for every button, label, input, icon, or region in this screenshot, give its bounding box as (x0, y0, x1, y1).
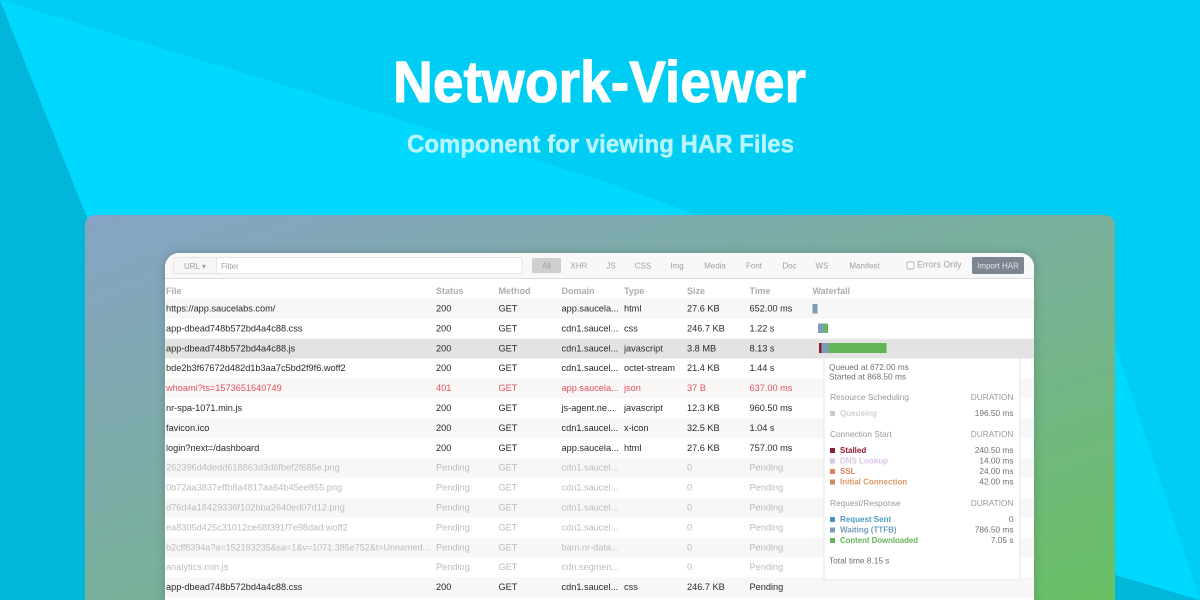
row: pending analytics: GET (498, 562, 518, 572)
table header: Status (436, 286, 464, 296)
tooltip: timing breakdown (824, 358, 1020, 580)
row: css: cdn1.saucel... (562, 323, 618, 333)
row: css repeat (166, 582, 783, 592)
toolbar: CSS (635, 262, 651, 270)
section: connection start: SSL (840, 467, 856, 476)
row: pending analytics (166, 562, 783, 572)
row: pending png 1: Pending (436, 463, 470, 473)
row: pending beacon (166, 542, 783, 552)
total time: Total time 8.15 s (829, 556, 889, 566)
section: request and response (830, 498, 1014, 545)
row: login: app.saucela... (562, 443, 619, 453)
row: whoami error: app.saucela... (562, 383, 619, 393)
section: connection start (830, 429, 1014, 486)
row: pending analytics: analytics.min.js (166, 562, 229, 572)
timing start text: Queued at 672.00 ms (829, 362, 909, 372)
row: pending png 2: 0b72aa3837effb8a4817aa64b45ee855.png (166, 483, 342, 493)
row: woff2: bde2b3f67672d482d1b3aa7c5bd2f9f6.woff2 (166, 363, 346, 373)
section: connection start: 14.00 ms (979, 456, 1014, 466)
row: app.saucelabs.com (166, 304, 793, 314)
table header (166, 286, 850, 296)
row: pending png 2: Pending (436, 483, 470, 493)
toolbar: Filter (221, 262, 239, 271)
row: login: 200 (436, 443, 451, 453)
row: pending beacon: Pending (436, 542, 470, 552)
row: favicon: 1.04 s (750, 423, 775, 433)
row: woff2: GET (498, 363, 518, 373)
section: request and response: Request/Response (830, 498, 901, 508)
row: pending analytics: 0 (687, 562, 692, 572)
row: woff2 (166, 363, 775, 373)
row: login: 757.00 ms (750, 443, 793, 453)
panel: gradient backdrop (85, 215, 1115, 600)
row: css: GET (498, 323, 518, 333)
row: pending woff2 (166, 522, 783, 532)
toolbar: JS (606, 262, 616, 270)
table header: Method (498, 286, 530, 296)
row: css: css (624, 323, 638, 333)
row: pending png 3: GET (498, 502, 518, 512)
row: app.saucelabs.com: html (624, 304, 641, 314)
section: connection start: 42.00 ms (979, 476, 1014, 486)
section: connection start: DNS Lookup (840, 456, 888, 466)
row: favicon: x-icon (624, 423, 649, 433)
row: pending png 1: cdn1.saucel... (562, 463, 618, 473)
row: pending png 1: 262396d4dedd618863d3d6fbef2f685e.png (166, 463, 340, 473)
row: js: app-dbead748b572bd4a4c88.js (166, 343, 296, 353)
row: pending woff2: 0 (687, 522, 692, 532)
section: resource scheduling (830, 392, 1014, 418)
row: pending png 1: Pending (750, 463, 783, 473)
section: connection start: DURATION (971, 429, 1014, 439)
section: resource scheduling: DURATION (971, 392, 1014, 402)
row: pending beacon: b2cff8394a?a=152193235&sa=1&v=1071.385e752&t=Unnamed... (166, 542, 430, 552)
section: request and response: DURATION (971, 498, 1014, 508)
toolbar: Media (704, 262, 726, 270)
row: favicon: 32.5 KB (687, 423, 720, 433)
section: connection start: Initial Connection (840, 478, 907, 486)
row: nr-spa: GET (498, 403, 518, 413)
row: nr-spa: nr-spa-1071.min.js (166, 403, 242, 413)
row: login: html (624, 443, 641, 453)
row: app.saucelabs.com: https://app.saucelabs.com/ (166, 304, 276, 314)
section: resource scheduling: 196.50 ms (975, 408, 1014, 418)
row: nr-spa: js-agent.ne... (560, 403, 615, 413)
table header: File (166, 286, 182, 296)
waterfall bars (812, 304, 886, 353)
toolbar: Import HAR (977, 262, 1019, 270)
section: request and response: Request Sent (840, 515, 891, 524)
row: woff2: octet-stream (624, 363, 675, 373)
toolbar: Manifest (849, 262, 880, 270)
row: pending analytics: cdn.segmen... (562, 562, 619, 572)
row: whoami error: 401 (436, 383, 451, 393)
subtitle: Component for viewing HAR Files (407, 130, 794, 158)
table header: Domain (562, 286, 595, 296)
row: pending png 2: GET (498, 483, 518, 493)
row: js: 200 (436, 343, 451, 353)
row: css repeat: cdn1.saucel... (562, 582, 618, 592)
section: connection start: Stalled (840, 446, 866, 455)
row: pending png 2: 0 (687, 483, 692, 493)
row: js: javascript (623, 343, 663, 353)
row: css repeat: 200 (436, 582, 451, 592)
section: resource scheduling: Queueing (840, 409, 877, 418)
row: pending woff2: ea8305d425c31012ce68f391f7e98dad.woff2 (166, 522, 348, 532)
toolbar: URL ▾ (184, 262, 206, 271)
row: favicon: GET (498, 423, 518, 433)
toolbar: Font (746, 262, 763, 270)
toolbar: Errors Only (917, 260, 962, 270)
row: login: GET (498, 443, 518, 453)
row: pending png 1: GET (498, 463, 518, 473)
row: pending beacon: 0 (687, 542, 692, 552)
row: css: 246.7 KB (687, 323, 725, 333)
toolbar: WS (816, 262, 828, 270)
row: app.saucelabs.com: 652.00 ms (750, 304, 793, 314)
row: nr-spa (166, 403, 793, 413)
row: whoami error: 637.00 ms (750, 383, 793, 393)
row: css: app-dbead748b572bd4a4c88.css (166, 323, 303, 333)
row: favicon: 200 (436, 423, 451, 433)
row: pending analytics: Pending (436, 562, 470, 572)
row: favicon: favicon.ico (166, 423, 209, 433)
row: css: 1.22 s (750, 323, 775, 333)
row: app.saucelabs.com: 200 (436, 304, 451, 314)
section: connection start: 24.00 ms (979, 466, 1014, 476)
row: whoami error: 37 B (687, 383, 706, 393)
row: whoami error: whoami?ts=1573651640749 (165, 383, 282, 393)
row: pending woff2: GET (498, 522, 518, 532)
row: app.saucelabs.com: app.saucela... (562, 304, 619, 314)
section: request and response: 786.50 ms (975, 524, 1014, 534)
title: Network-Viewer (393, 50, 806, 115)
row: pending png 3: cdn1.saucel... (562, 502, 618, 512)
row: js: GET (498, 343, 518, 353)
row: css repeat: css (624, 582, 638, 592)
row: login: login?next=/dashboard (166, 443, 259, 453)
row: pending beacon: GET (498, 542, 518, 552)
row: favicon: cdn1.saucel... (562, 423, 618, 433)
row: pending woff2: Pending (750, 522, 783, 532)
row: pending png 1 (166, 463, 783, 473)
row: woff2: 1.44 s (750, 363, 775, 373)
row: pending png 2: cdn1.saucel... (562, 483, 618, 493)
row: js: 3.8 MB (687, 343, 716, 353)
row: pending png 3: d76d4a18429336f102bba2640ed07d12.png (166, 502, 345, 512)
row: app.saucelabs.com: 27.6 KB (687, 304, 720, 314)
section: request and response: 7.05 s (991, 535, 1014, 545)
row: pending analytics: Pending (750, 562, 783, 572)
row: pending beacon: Pending (750, 542, 783, 552)
row: css repeat: app-dbead748b572bd4a4c88.css (166, 582, 303, 592)
row: css (166, 323, 775, 333)
row: woff2: cdn1.saucel... (562, 363, 618, 373)
section: resource scheduling: Resource Scheduling (830, 392, 909, 402)
row: nr-spa: javascript (623, 403, 663, 413)
row: nr-spa: 12.3 KB (687, 403, 720, 413)
row: nr-spa: 960.50 ms (750, 403, 793, 413)
table header: Type (624, 286, 644, 296)
row: app.saucelabs.com: GET (498, 304, 518, 314)
toolbar: All (542, 262, 551, 270)
table header: Time (750, 286, 770, 296)
row: pending png 2: Pending (750, 483, 783, 493)
section: request and response: Waiting (TTFB) (840, 526, 897, 534)
row: pending png 3 (166, 502, 783, 512)
row: whoami error (165, 383, 793, 393)
timing start text: Started at 868.50 ms (829, 372, 906, 382)
row: pending beacon: bam.nr-data... (562, 542, 619, 552)
table header: Waterfall (812, 286, 850, 296)
timing start text (829, 362, 909, 382)
row: pending png 2 (166, 483, 783, 493)
toolbar: Doc (782, 262, 797, 270)
row: nr-spa: 200 (436, 403, 451, 413)
row: whoami error: GET (498, 383, 518, 393)
row: pending woff2: cdn1.saucel... (562, 522, 618, 532)
row: pending png 3: Pending (750, 502, 783, 512)
toolbar: Img (670, 262, 684, 270)
row: login (166, 443, 793, 453)
row: favicon (166, 423, 775, 433)
row: woff2: 21.4 KB (687, 363, 720, 373)
row: pending png 1: 0 (687, 463, 692, 473)
row: pending png 3: 0 (687, 502, 692, 512)
row: login: 27.6 KB (687, 443, 720, 453)
section: request and response: 0 (1009, 514, 1014, 524)
section: connection start: Connection Start (830, 429, 892, 439)
row: css repeat: GET (498, 582, 518, 592)
section: request and response: Content Downloaded (840, 536, 918, 545)
row: css: 200 (436, 323, 451, 333)
table header: Size (687, 286, 705, 296)
row: js: 8.13 s (750, 343, 775, 353)
row: pending woff2: Pending (436, 522, 470, 532)
row: css repeat: 246.7 KB (687, 582, 725, 592)
row: js: cdn1.saucel... (562, 343, 618, 353)
section: connection start: 240.50 ms (975, 445, 1014, 455)
toolbar: XHR (571, 262, 588, 270)
row: css repeat: Pending (750, 582, 783, 592)
panel: application screenshot (165, 253, 1034, 600)
row: pending png 3: Pending (436, 502, 470, 512)
row bands (165, 299, 1034, 597)
row: whoami error: json (623, 383, 641, 393)
row: woff2: 200 (436, 363, 451, 373)
row: js (166, 343, 775, 353)
toolbar (165, 253, 1034, 279)
